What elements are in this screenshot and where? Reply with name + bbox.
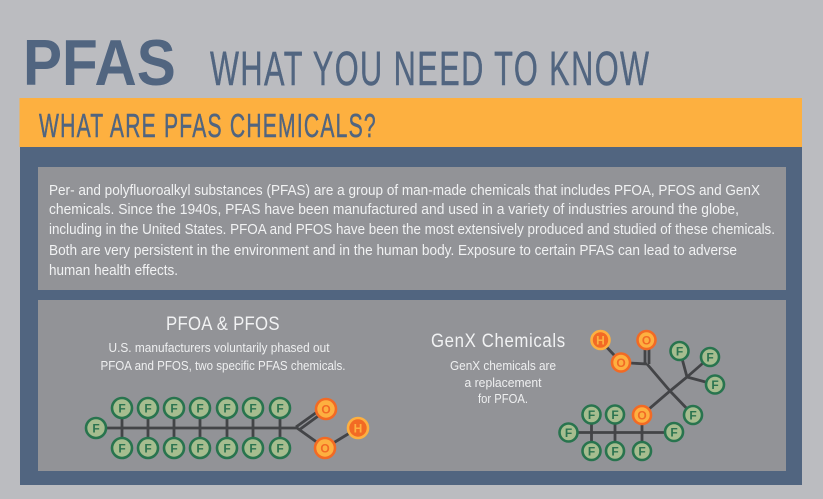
diagram: PFOA molecule: F <box>118 402 126 416</box>
diagram: PFOA molecule <box>86 398 368 458</box>
subtitle: what you need to know: WHAT YOU NEED TO KNOW <box>210 42 649 96</box>
diagram: GenX molecule: F <box>611 408 619 422</box>
diagram: PFOA molecule: F <box>249 442 257 456</box>
diagram: PFOA molecule: F <box>223 442 231 456</box>
diagram: PFOA molecule: F <box>144 402 152 416</box>
panel: blue content background <box>20 147 802 485</box>
diagram: GenX molecule: O <box>616 356 626 370</box>
diagram: PFOA molecule: F <box>249 402 257 416</box>
diagram: PFOA molecule: F <box>170 442 178 456</box>
diagram: PFOA molecule: F <box>223 402 231 416</box>
text block: PFOA and PFOS description: U.S. manufacturers voluntarily phased out <box>108 340 330 355</box>
text block: PFOA and PFOS description: PFOA and PFOS, two specific PFAS chemicals. <box>100 358 346 373</box>
diagram: GenX molecule <box>560 331 724 460</box>
diagram: PFOA molecule: F <box>144 442 152 456</box>
diagram: PFOA molecule: O <box>321 402 331 416</box>
diagram: PFOA molecule: F <box>196 402 204 416</box>
diagram: GenX molecule: F <box>565 426 572 440</box>
panel: chemical examples <box>38 300 786 471</box>
heading: GenX chemicals: GenX Chemicals <box>431 330 565 351</box>
diagram: GenX molecule: F <box>711 378 719 392</box>
diagram: GenX molecule: F <box>676 344 683 358</box>
text block: PFAS definition <box>49 183 775 279</box>
diagram: PFOA molecule: F <box>170 402 178 416</box>
diagram: GenX molecule: H <box>596 334 605 348</box>
text block: PFAS definition: Per- and polyfluoroalkyl substances (PFAS) are a group of man-made chemicals that includes PFOA, PFOS and GenX <box>49 183 760 199</box>
diagram: GenX molecule: F <box>670 426 678 440</box>
text block: GenX description <box>450 358 556 406</box>
text block: GenX description: GenX chemicals are <box>450 358 556 373</box>
diagram: GenX molecule: F <box>611 444 619 458</box>
diagram: GenX molecule: F <box>588 444 595 458</box>
panel: introduction <box>38 167 786 290</box>
diagram: PFOA molecule: F <box>276 402 284 416</box>
text block: PFOA and PFOS description <box>100 340 346 373</box>
diagram: GenX molecule: O <box>642 334 651 348</box>
heading: PFOA and PFOS: PFOA & PFOS <box>166 313 280 334</box>
diagram: PFOA molecule: F <box>118 442 126 456</box>
diagram: PFOA molecule: F <box>196 442 204 456</box>
diagram: GenX molecule: O <box>637 408 647 422</box>
diagram: PFOA molecule: O <box>320 442 330 456</box>
diagram: GenX molecule: F <box>706 350 714 364</box>
banner: orange heading bar <box>20 98 802 147</box>
text block: PFAS definition: chemicals. Since the 1940s, PFAS have been manufactured and used in a variety of industries around the globe, <box>49 202 739 218</box>
heading: what are PFAS chemicals: WHAT ARE PFAS CHEMICALS? <box>39 107 376 144</box>
diagram: PFOA molecule: H <box>354 422 362 436</box>
text block: PFAS definition: Both are very persistent in the environment and in the human body. Exposure to certain PFAS can lead to adverse <box>49 243 737 259</box>
text block: PFAS definition: including in the United States. PFOA and PFOS have been the most extensively produced and studied of these chemicals. <box>49 222 775 238</box>
text block: PFAS definition: human health effects. <box>49 263 178 279</box>
diagram: PFOA molecule: F <box>92 422 100 436</box>
diagram: PFOA molecule: F <box>276 442 284 456</box>
diagram: GenX molecule: F <box>638 444 646 458</box>
text block: GenX description: a replacement <box>464 375 542 390</box>
title: PFAS: PFAS <box>23 27 176 100</box>
diagram: GenX molecule: F <box>588 408 595 422</box>
text block: GenX description: for PFOA. <box>478 391 528 406</box>
diagram: GenX molecule: F <box>689 408 697 422</box>
